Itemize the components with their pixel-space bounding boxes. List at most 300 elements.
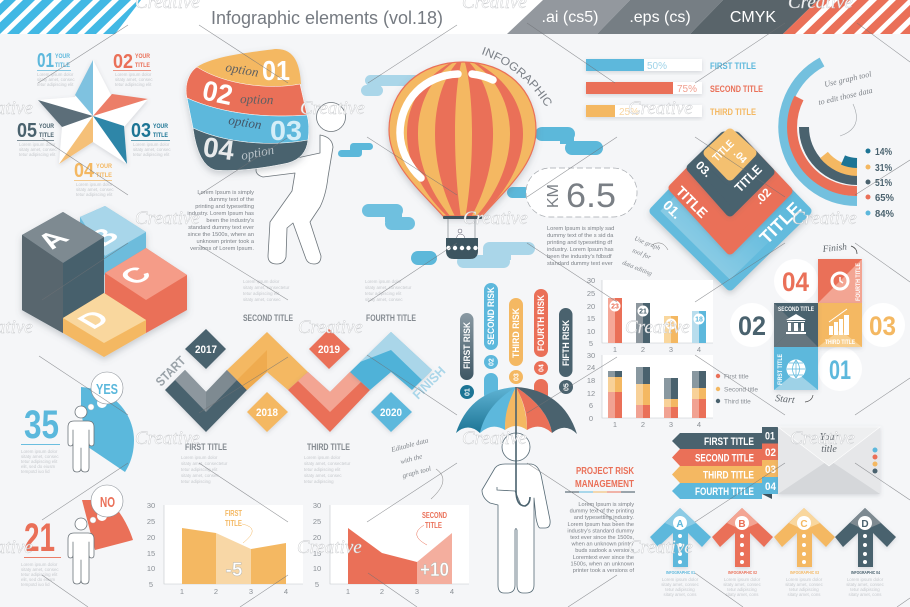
progress bars: 50%: [647, 61, 667, 72]
project risk text block: Lorem Ipsum has been the: [567, 522, 634, 528]
lorem third title: [304, 455, 351, 484]
band 01: option: [224, 59, 260, 80]
label 01: TITLE: [55, 62, 71, 69]
second risk: 02: [488, 358, 496, 366]
lorem above timeline: fourth: [365, 279, 412, 302]
project risk text block: text ever since the 1500s,: [570, 535, 634, 541]
y axis labels: 15: [587, 314, 595, 323]
person text block: dummy text of the: [209, 197, 254, 203]
radial note: [817, 69, 873, 107]
bar 21: 21: [639, 308, 647, 316]
arrow d: D: [861, 519, 869, 530]
arrow a: sitaty amet, cons: [664, 592, 697, 597]
label 04: TITLE: [96, 172, 113, 179]
heading third title: THIRD TITLE: [307, 442, 350, 453]
label 05: [17, 120, 57, 157]
arrow a: INFOGRAPHIC 01: [666, 570, 695, 575]
watermark logos: Creative: [792, 208, 857, 229]
arrow c: C: [800, 519, 808, 530]
callout first title: TITLE: [225, 519, 243, 528]
lorem yes: sitaty amet, consec: [21, 454, 59, 459]
layer orange: [708, 133, 752, 176]
start note: [775, 393, 813, 406]
value 21: 21: [24, 516, 55, 560]
x axis labels: 3: [669, 345, 673, 354]
x axis labels: 3: [249, 587, 253, 596]
legend: First title: [724, 374, 749, 380]
y axis labels: 18: [587, 376, 595, 385]
canopy: [456, 387, 577, 434]
x axis labels: 1: [180, 587, 184, 596]
person text block: unknown printer took a: [196, 239, 255, 245]
watermark logos: Creative: [298, 317, 363, 338]
heading fourth title: FOURTH TITLE: [366, 313, 416, 324]
arrow a: sitaty amet, consec: [661, 582, 700, 587]
arrow b: sitaty amet, cons: [726, 592, 759, 597]
label 03: tetur adipiscing elit: [133, 152, 170, 157]
label 01: tetur adipiscing elit: [37, 82, 74, 87]
lorem third title: sitaty amet, consec: [304, 473, 342, 478]
cube a: A: [30, 226, 76, 254]
stack 1: [608, 371, 622, 418]
fifth risk: [559, 308, 573, 394]
band 03: [187, 98, 309, 146]
isometric abcd cubes: [22, 206, 187, 357]
arrow a: A: [676, 519, 684, 530]
arrow c: Lorem ipsum dolor: [786, 577, 823, 582]
y axis labels: 6: [589, 401, 593, 410]
layer orange: TITLE: [711, 138, 737, 164]
risk pills: [460, 283, 573, 403]
value minus five: -5: [226, 560, 243, 581]
label 02: TITLE: [135, 62, 151, 69]
label 05: 05: [17, 120, 37, 142]
area series: [348, 528, 452, 584]
circle 03: 03: [869, 311, 896, 341]
person text block: industry. Lorem Ipsum has: [187, 211, 254, 217]
cube c: [105, 248, 187, 333]
progress bars: THIRD TITLE: [710, 107, 756, 118]
callout first title: FIRST: [225, 509, 242, 518]
label 04: Lorem ipsum dolor: [76, 182, 113, 187]
y axis labels: 5: [315, 580, 319, 589]
envelope title: title: [821, 444, 837, 455]
diamond 2018: 2018: [256, 407, 278, 419]
number tabs: [762, 427, 778, 494]
x axis labels: 1: [346, 587, 350, 596]
label 05: sitaty amet, consec: [19, 147, 57, 152]
progress bars: FIRST TITLE: [710, 61, 756, 72]
y axis labels: 15: [147, 549, 155, 558]
arrow c: [774, 508, 835, 597]
y axis labels: 0: [589, 414, 593, 423]
label 03: [131, 120, 171, 157]
head: [502, 433, 530, 461]
x axis labels: [613, 345, 701, 354]
callout first title: [225, 509, 252, 543]
project risk text block: and typesetting industry.: [574, 515, 634, 521]
label 05: TITLE: [39, 132, 55, 139]
callout second title: [417, 511, 447, 545]
lorem above timeline: second: sitaty amet, consectetur: [243, 285, 290, 290]
lorem above timeline: fourth: sitaty amet, consec: [365, 297, 403, 302]
finish note: [821, 242, 857, 255]
legend: Second title: [724, 386, 758, 394]
lorem yes: elit, sed do eiusm: [21, 464, 56, 469]
banner: ai: .ai (cs5): [542, 9, 598, 26]
watermark logos: Creative: [297, 537, 362, 558]
handwritten note: editable data: graph tool: [401, 465, 432, 480]
x axis labels: 2: [214, 587, 218, 596]
first risk: FIRST RISK: [462, 322, 473, 369]
layer blue: TITLE: [756, 198, 805, 248]
handwritten note: graph tool: [621, 235, 668, 278]
x axis labels: [346, 587, 454, 596]
diamond 2019: [309, 329, 350, 369]
project risk text block: 1500s, when an unknown: [571, 561, 634, 567]
y axis labels: [313, 501, 321, 589]
person text block: standard dummy text ever: [188, 225, 254, 231]
arrow c: sitaty amet, consec: [785, 582, 824, 587]
bar 18: 18: [695, 316, 703, 324]
banner: cmyk: [690, 0, 818, 34]
heading second title: SECOND TITLE: [243, 313, 293, 324]
lorem above timeline: second: [243, 279, 290, 302]
square first: FIRST TITLE: [778, 354, 784, 385]
bar third: [586, 105, 702, 117]
bar chart: [587, 276, 713, 354]
radial legend: 51%: [875, 177, 893, 189]
number tabs: 04: [765, 481, 777, 493]
person text block: Lorem Ipsum is simply: [197, 190, 254, 196]
x axis labels: 1: [613, 345, 617, 354]
y axis labels: 10: [147, 564, 155, 573]
radial legend: 31%: [875, 162, 893, 174]
lorem first title: sitaty amet, consec: [181, 473, 219, 478]
y axis labels: 12: [587, 389, 595, 398]
zag orange: [227, 332, 308, 390]
curved label infographic: INFOGRAPHIC: [482, 47, 552, 106]
arrow b: sitaty amet, consec: [723, 582, 762, 587]
watermark logos: Creative: [790, 428, 855, 449]
balloon text block: printing and typesetting df: [547, 240, 613, 246]
progress bars: 75%: [677, 84, 697, 95]
y axis labels: 30: [587, 351, 595, 360]
circle 02: 02: [738, 311, 766, 341]
balloon text block: industry. Lorem Ipsum has: [547, 247, 614, 253]
person text block: versions of Lorem Ipsum.: [190, 246, 254, 252]
third risk: [509, 298, 523, 384]
x axis labels: 3: [669, 420, 673, 429]
project risk text block: Lorem Ipsum is simply: [578, 502, 634, 508]
arrow d: sitaty amet, cons: [849, 592, 882, 597]
square fourth: FOURTH TITLE: [856, 263, 862, 301]
arrow a: Lorem ipsum dolor: [662, 577, 699, 582]
balloon text block: [547, 226, 614, 267]
square puzzle process: [730, 242, 905, 406]
square third: THIRD TITLE: [825, 340, 855, 346]
layer red: .02: [752, 185, 774, 207]
lorem no: sitaty amet, consec: [21, 567, 59, 572]
start label: START: [153, 353, 189, 389]
balloon text block: standard dummy text ever: [547, 261, 613, 267]
circle 04: 04: [782, 267, 809, 297]
third risk: 03: [514, 373, 520, 381]
header bar: [0, 0, 910, 34]
heading first title: FIRST TITLE: [185, 442, 227, 453]
arrow b: tetur adipiscing: [727, 587, 757, 592]
band 04: option: [240, 142, 275, 163]
ribbon third: THIRD TITLE: [703, 470, 754, 482]
finish note: Finish: [821, 242, 848, 255]
layer blue: 01.: [660, 197, 685, 222]
arrow c: INFOGRAPHIC 03: [790, 570, 819, 575]
person pushing stack: [256, 102, 346, 264]
radial note: Use graph tool: [823, 69, 873, 89]
zag blue: [350, 332, 432, 390]
person text block: been the industry's: [206, 218, 254, 224]
square second: SECOND TITLE: [778, 307, 814, 313]
envelope title: Your: [820, 432, 838, 443]
label 01: 01: [37, 50, 54, 72]
arrow c: tetur adipiscing: [789, 587, 819, 592]
layer dark: [691, 136, 770, 212]
y axis labels: 10: [587, 327, 595, 336]
envelope dots: [872, 448, 878, 474]
arrow d: sitaty amet, consec: [846, 582, 885, 587]
label 03: sitaty amet, consec: [133, 147, 171, 152]
x axis labels: 1: [613, 420, 617, 429]
bar 23: 23: [611, 304, 619, 310]
arrow d: tetur adipiscing: [850, 587, 880, 592]
project risk heading: MANAGEMENT: [575, 478, 634, 490]
envelope: [389, 62, 536, 217]
watermark logos: Creative: [463, 208, 528, 229]
project risk text block: Loremtext ever since the: [573, 555, 634, 561]
lorem yes: tempotd iuo lid: [21, 469, 50, 474]
handwritten note: editable data: [389, 436, 443, 499]
radial legend: [866, 146, 895, 220]
star infographic: [17, 50, 171, 197]
watermark logos: Creative: [135, 428, 200, 449]
first risk: [460, 313, 474, 399]
circle 01: 01: [829, 355, 851, 385]
label 02: sitaty amet, consec: [115, 77, 153, 82]
layer blue: [654, 142, 807, 286]
band 02: option: [240, 91, 274, 107]
layer red: [673, 138, 788, 250]
balloon text block: Lorem Ipsum is simply sad: [547, 226, 614, 232]
lorem first title: [181, 455, 228, 484]
y axis labels: 20: [313, 533, 321, 542]
lorem above timeline: second: tetur adipiscing elit: [243, 291, 280, 296]
diamond 2020: [371, 392, 412, 432]
number tabs: 01: [765, 430, 775, 442]
finish label: FINISH: [410, 363, 448, 402]
lorem first title: Lorem ipsum dolor: [181, 455, 218, 460]
label 04: 04: [74, 160, 95, 182]
lorem yes: Lorem ipsum dolor: [21, 449, 58, 454]
label 04: sitaty amet, consec: [76, 187, 114, 192]
arrow d: INFOGRAPHIC 04: [851, 570, 880, 575]
lorem no: tempotd iuo lid: [21, 582, 50, 587]
callout second title: TITLE: [425, 521, 443, 530]
progress bars: SECOND TITLE: [710, 84, 763, 95]
bar second: [586, 82, 702, 94]
band 01: [197, 49, 301, 86]
label 05: Lorem ipsum dolor: [19, 142, 56, 147]
label 05: YOUR: [39, 123, 54, 130]
head: [316, 102, 346, 132]
lorem yes: [21, 449, 59, 474]
watermark logos: Creative: [135, 208, 200, 229]
watermark logos: Creative: [625, 317, 690, 338]
project risk text block: [567, 502, 634, 574]
label 05: tetur adipiscing elit: [19, 152, 56, 157]
blue stripes: [0, 0, 141, 34]
label 04: [74, 160, 114, 197]
sector red: [82, 500, 133, 550]
diamond 2020: 2020: [380, 407, 402, 419]
sector blue: [81, 387, 134, 472]
y axis labels: 25: [313, 517, 321, 526]
banner: eps: [597, 0, 723, 34]
fifth risk: FIFTH RISK: [561, 320, 572, 366]
star shape: [38, 60, 148, 164]
lorem no: Lorem ipsum dolor: [21, 562, 58, 567]
lorem first title: tetur adipiscing: [181, 479, 211, 484]
ribbon fourth: FOURTH TITLE: [695, 486, 754, 498]
radial legend: 65%: [875, 192, 895, 204]
arrow c: sitaty amet, cons: [788, 592, 821, 597]
radial arcs: [783, 62, 857, 201]
title: Infographic elements (vol.18): [211, 8, 443, 28]
value plus ten: +10: [420, 560, 449, 581]
layer orange: .04: [731, 148, 749, 166]
banner: ai: [507, 0, 630, 34]
first risk: 01: [464, 388, 472, 396]
label 02: Lorem ipsum dolor: [115, 72, 152, 77]
label 01: [37, 50, 75, 87]
diamond 2017: 2017: [195, 344, 217, 356]
legend: Third title: [724, 398, 751, 406]
no panel: [21, 485, 133, 587]
layered diamond: [654, 133, 807, 286]
project risk text block: printer took a versions of: [573, 568, 634, 574]
balloon text block: been the industry's fdbsdf: [547, 254, 612, 260]
red stripes: [783, 0, 910, 34]
KM distance box: 6.5: [566, 177, 616, 215]
person yes: [68, 406, 94, 472]
bar first: [586, 59, 702, 71]
arrow b: INFOGRAPHIC 02: [728, 570, 757, 575]
lorem above timeline: fourth: Lorem ipsum dolor: [365, 279, 402, 284]
label 02: [113, 51, 153, 87]
start note: Start: [775, 393, 795, 406]
basket: [443, 216, 482, 259]
x axis labels: 2: [641, 345, 645, 354]
project risk text block: industry's standard dummy: [567, 528, 634, 534]
handwritten note: editable data: with the: [399, 452, 423, 466]
project risk text block: when an unknown printer: [570, 542, 634, 548]
diamond 2019: 2019: [318, 344, 340, 356]
stack 2: [636, 367, 650, 418]
y axis labels: 25: [587, 289, 595, 298]
stack 3: [664, 378, 678, 418]
radial legend: 14%: [875, 146, 893, 158]
stacked bar chart: [587, 351, 758, 429]
band 02: 02: [200, 75, 236, 111]
label 01: sitaty amet, consec: [37, 77, 75, 82]
x axis labels: 3: [415, 587, 419, 596]
label 02: tetur adipiscing elit: [115, 82, 152, 87]
x axis labels: [180, 587, 288, 596]
y axis labels: 30: [147, 501, 155, 510]
clouds: [338, 75, 603, 268]
zig dark: [165, 370, 247, 432]
balloon text block: dummy text of the s sid da: [547, 233, 614, 239]
arrow b: Lorem ipsum dolor: [724, 577, 761, 582]
y axis labels: 30: [587, 276, 595, 285]
label 01: Lorem ipsum dolor: [37, 72, 74, 77]
handwritten note: graph tool: Use graph: [633, 235, 661, 252]
arrow a: [650, 508, 711, 597]
label 03: 03: [131, 120, 151, 142]
area series: [182, 528, 286, 584]
y axis labels: 25: [147, 517, 155, 526]
cube d: D: [71, 306, 117, 334]
ribbon first: FIRST TITLE: [704, 436, 754, 448]
x axis labels: 2: [641, 420, 645, 429]
y axis labels: 20: [587, 302, 595, 311]
label 01: YOUR: [55, 53, 70, 60]
lorem no: elit, sed do eiusm: [21, 577, 56, 582]
person no: [68, 518, 94, 584]
x axis labels: 4: [284, 587, 288, 596]
envelope title: [820, 432, 838, 455]
third risk: THIRD RISK: [511, 308, 522, 358]
x axis labels: 4: [697, 345, 701, 354]
y axis labels: 20: [147, 533, 155, 542]
layer dark: TITLE: [732, 162, 765, 195]
lorem third title: tetur adipiscing: [304, 479, 334, 484]
lorem third title: tetur adipiscing elit: [304, 467, 341, 472]
band 03: 03: [270, 115, 302, 146]
square fourth: [818, 259, 862, 303]
body: [256, 135, 333, 264]
second risk: SECOND RISK: [486, 287, 497, 345]
lorem first title: tetur adipiscing elit: [181, 467, 218, 472]
radial note: to edit those data: [817, 86, 873, 107]
bubble yes: YES: [96, 381, 118, 398]
cube d: [63, 293, 146, 357]
number tabs: 03: [765, 464, 776, 476]
lorem above timeline: fourth: tetur adipiscing elit: [365, 291, 402, 296]
progress bars: [586, 59, 763, 118]
radial chart: [783, 62, 895, 220]
lorem above timeline: second: Lorem ipsum dolor: [243, 279, 280, 284]
timeline zigzag: [153, 313, 448, 484]
label 03: YOUR: [153, 123, 168, 130]
square first: [774, 347, 818, 390]
x axis labels: 2: [380, 587, 384, 596]
y axis labels: [147, 501, 155, 589]
label 04: YOUR: [96, 163, 112, 170]
layer red: TITLE: [673, 183, 711, 221]
lorem third title: sitaty amet, consectetur: [304, 461, 351, 466]
value 35: 35: [24, 403, 59, 447]
layer dark: 03.: [693, 158, 715, 180]
